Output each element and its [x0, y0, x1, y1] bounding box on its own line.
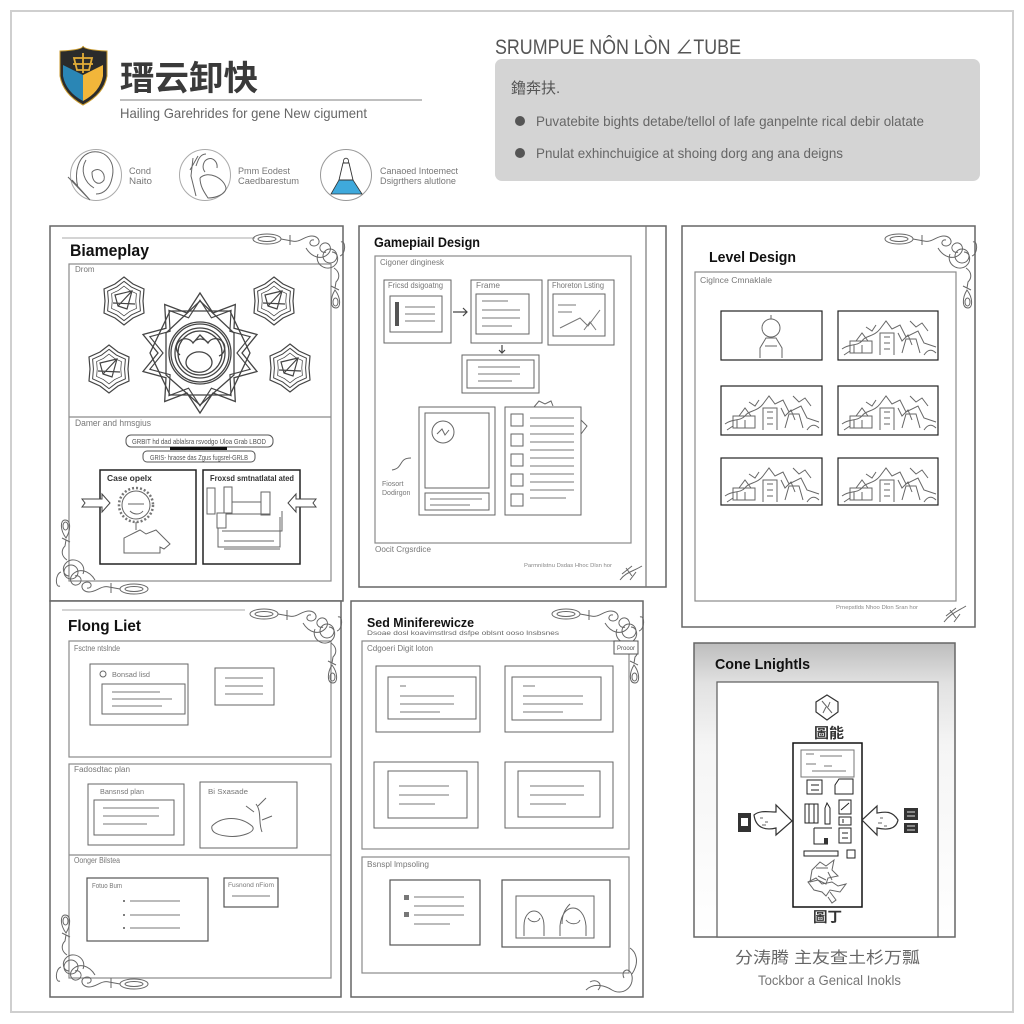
ornament: footer: [944, 606, 966, 622]
title: 瑨云卸快: [120, 60, 258, 98]
section label: Ciglnce Cmnaklale: [700, 276, 773, 285]
panel: level design: [682, 226, 977, 627]
annotation sketch: Dodirgon: [382, 490, 411, 497]
icon: person portrait: [68, 150, 122, 200]
footer note: Parmnilstnu Dsdas Hhoc Dlsn hor: [524, 563, 612, 569]
arrow: left input: [738, 805, 792, 835]
annotation sketch: [382, 401, 587, 497]
pill labels: GRBIT hd dad ablalsra rsvodgo Uloa Grab LBOD: [132, 437, 266, 446]
box: second step: Frame: [476, 281, 501, 290]
level row 2: [721, 386, 938, 435]
arrow: down to centre: [499, 345, 505, 353]
icon row: [68, 150, 458, 200]
ornament: bottom right: [586, 948, 636, 992]
icon label: Naito: [129, 176, 152, 186]
box: lower right: [505, 407, 581, 515]
form box 1: Bonsad lisd: [112, 672, 150, 679]
pill labels: GRIS- hraose das Zgus fugsrel-GRLB: [150, 453, 248, 462]
level row 3: [721, 458, 938, 505]
panel: miniferewicze: [351, 601, 644, 997]
panel: core insights: [694, 643, 955, 937]
icon label: Caedbarestum: [238, 176, 299, 186]
section label: Drom: [75, 265, 95, 274]
panel: gameplay: [50, 226, 345, 601]
tag: [614, 641, 638, 654]
footer label: Oocit Crgsrdice: [375, 545, 432, 554]
form box 3: Bansnsd plan: [100, 789, 144, 796]
bullet 1: Puvatebite bights detabe/tellol of lafe ganpelnte rical debir olatate: [536, 113, 924, 129]
section label: Bsnspl lmpsoling: [367, 860, 429, 869]
form box 5: Fotuo Bum: [92, 883, 122, 890]
form box 5: [87, 878, 208, 941]
footer caption: CJK: 分涛腾 主友查土杉万瓢: [735, 949, 920, 967]
form box 4: [505, 762, 613, 828]
diagram: small star lower left: [89, 345, 129, 393]
bullet 2: Pnulat exhinchuigice at shoing dorg ang ana deigns: [536, 145, 843, 161]
form box 6: Fusnond nFiom: [228, 882, 274, 889]
level row 1: [721, 311, 938, 360]
panel: gameplay design: [359, 226, 666, 587]
subtitle: Hailing Garehrides for gene New cigument: [120, 105, 367, 121]
icon label: Cond: [129, 166, 151, 176]
box: flow: [203, 470, 300, 564]
panel title: Level Design: [709, 249, 796, 266]
box: character: Case opelx: [107, 473, 152, 483]
form box 5: [390, 880, 480, 945]
box: centre: [462, 355, 539, 393]
section label: Damer and hmsgius: [75, 418, 151, 428]
diagram: central star: [143, 293, 257, 413]
box: lower left: [419, 407, 495, 515]
form box 6: portraits: [502, 880, 610, 947]
ornament: top right: [253, 234, 345, 308]
box: third step: Fhoreton Lsting: [552, 281, 604, 290]
ornament: top right: [552, 609, 644, 683]
arrow: step one to two: [453, 308, 467, 316]
icon label: Pmm Eodest: [238, 166, 290, 176]
panel title: Biameplay: [70, 241, 150, 260]
ornament: footer: [620, 566, 642, 580]
diagram: small star top right: [254, 277, 294, 325]
panel title: Flong Liet: [68, 618, 142, 635]
annotation sketch: Fiosort: [382, 481, 403, 488]
form box 2: [215, 668, 274, 705]
section label: Fsctne ntslnde: [74, 644, 120, 653]
icon: figure with tool: [180, 150, 230, 200]
icon label: Canaoed Intoemect: [380, 166, 458, 176]
form box 1: [376, 666, 480, 732]
icon caption: 圖能: [814, 725, 844, 741]
box: first step: [384, 280, 451, 343]
form box 3: [88, 784, 184, 845]
icon: blue flask: [320, 150, 372, 200]
box: character: [100, 470, 196, 564]
ornament: top right: [250, 609, 342, 683]
footer note: Prnepstlds Nhoo Dlon Sran hor: [836, 605, 918, 611]
section label: Fadosdtac plan: [74, 765, 130, 774]
box: third step: [548, 280, 614, 345]
title rule: [120, 99, 422, 101]
footer caption: Latin: Tockbor a Gеnical Inokls: [758, 973, 901, 988]
panel title: Sed Miniferewicze: [367, 615, 474, 630]
tag: Prooor: [617, 646, 635, 652]
form box 4: [200, 782, 297, 848]
panel: summary: [495, 59, 980, 181]
ornament: top right: [885, 234, 977, 308]
arrow: right: [288, 494, 316, 512]
panel: flow list: [50, 601, 342, 997]
form box 4: Bi Sxasade: [208, 789, 248, 796]
summary heading: 鑥奔扶.: [511, 80, 560, 97]
diagram: central column: [793, 743, 862, 907]
icon: hexagon: [816, 695, 838, 720]
section label: Cdgoeri Digit loton: [367, 644, 433, 653]
box: flow: Froxsd smtnatlatal ated: [210, 473, 294, 483]
icon: shield logo: [60, 46, 107, 105]
header: brand block: [60, 46, 422, 121]
diagram: small star lower right: [270, 344, 310, 392]
form box 1: [90, 664, 188, 725]
ornament: bottom left: [56, 915, 148, 989]
section label: Oonger Bilstea: [74, 856, 120, 865]
pill labels: [126, 435, 273, 462]
form box 3: [374, 762, 478, 828]
panel subtitle: Dsoae dosl koavimstlrsd dsfpe oblsnt ooso lnsbsnes: [367, 630, 560, 637]
arrow: right input: [862, 806, 918, 835]
section label: Cigoner dinginesk: [380, 258, 445, 267]
panel title: Cone Lnightls: [715, 656, 810, 673]
diagram: small star top left: [104, 277, 144, 325]
box: second step: [471, 280, 542, 343]
form box 6: [224, 878, 278, 907]
form box 2: [505, 666, 613, 732]
arrow: left: [82, 494, 110, 512]
box: first step: Fricsd dsigoatng: [388, 281, 443, 290]
column caption: 圖丁: [813, 909, 842, 925]
panel title: Gamepiail Design: [374, 234, 480, 250]
heading: summary: SRUMPUE NÔN LÒN ∠TUBE: [495, 36, 741, 59]
ornament: bottom left: [56, 520, 148, 594]
icon label: Dsigrthers alutlone: [380, 176, 456, 186]
